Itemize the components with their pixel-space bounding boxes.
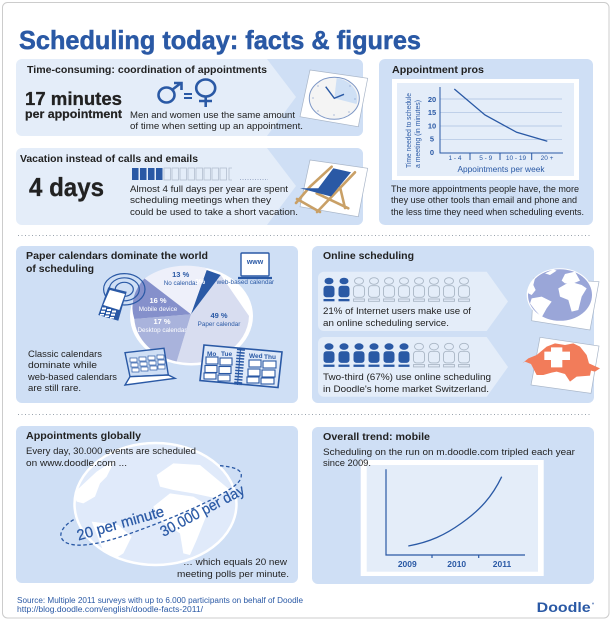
arrow panel: internet users <box>318 272 508 331</box>
stat: 4 days: 4 days <box>29 172 104 202</box>
pie chart: 49 % <box>210 311 228 320</box>
text: classic calendars <box>27 349 117 394</box>
pie chart: Mobile device <box>139 306 178 313</box>
source note: http://blog.doodle.com/english/doodle-facts-2011/ <box>17 605 204 614</box>
panel: paper calendars <box>16 246 298 403</box>
text: which equals <box>177 557 289 580</box>
description line 2: of time when setting up an appointment. <box>130 121 303 132</box>
line chart: 5 <box>430 134 434 144</box>
pie chart: Desktop calendar <box>137 327 187 334</box>
line chart: 0 <box>430 148 434 157</box>
text: every day: on www.doodle.com ... <box>26 458 127 469</box>
line chart: 20 <box>428 95 436 104</box>
pie chart: 13 % <box>172 270 190 279</box>
description: appointment pros <box>391 184 584 218</box>
line chart: Time needed to schedule <box>406 93 413 168</box>
people row 67% <box>324 343 470 367</box>
text: 67% <box>323 372 491 395</box>
heading: paper calendars <box>26 251 208 275</box>
pie chart: 17 % <box>153 317 171 326</box>
text: classic calendars: are still rare. <box>28 383 81 394</box>
description: appointment pros: the less time they need when scheduling events. <box>391 207 584 218</box>
trend chart: 2011 <box>493 559 511 569</box>
heading: vacation: Vacation instead of calls and emails <box>20 154 198 165</box>
text: which equals: … which equals 20 new <box>183 557 287 568</box>
line chart: 10 - 19 <box>506 155 526 162</box>
description: men and women: Men and women use the same amount <box>130 110 295 121</box>
text: which equals: meeting polls per minute. <box>177 569 289 580</box>
icon: male equals female <box>158 80 215 107</box>
line chart <box>392 79 579 180</box>
trend chart: 2010 <box>447 559 466 569</box>
icon: paper calendar: Mo <box>207 351 216 358</box>
heading: overall trend: Overall trend: mobile <box>323 432 430 443</box>
text: 21%: an online scheduling service. <box>323 318 449 329</box>
description: vacation: Almost 4 full days per year are spent <box>130 184 289 194</box>
source note: Source: Multiple 2011 surveys with up to 6.000 participants on behalf of Doodle <box>17 596 304 605</box>
text: 67%: in Doodle's home market Switzerland. <box>323 384 489 395</box>
icon: paper calendar: Tue <box>221 351 232 358</box>
description: vacation: could be used to take a short vacation. <box>130 207 298 217</box>
text: every day <box>26 446 196 469</box>
line chart: 10 <box>428 122 436 130</box>
text: classic calendars: dominate while <box>28 360 97 371</box>
pie chart: 3% <box>195 279 206 286</box>
title: Scheduling today: facts & figures <box>19 25 421 55</box>
heading: paper calendars: Paper calendars dominate the world <box>26 251 208 262</box>
pie chart: web-based calendar <box>216 279 274 286</box>
line chart: 20 + <box>541 155 554 162</box>
icon: world globe <box>73 443 236 565</box>
description: appointment pros: The more appointments people have, the more <box>391 184 579 195</box>
line chart: Appointments per week <box>458 165 546 174</box>
heading: online scheduling: Online scheduling <box>323 251 414 262</box>
heading: paper calendars: of scheduling <box>26 264 94 275</box>
text: every day: Every day, 30.000 events are scheduled <box>26 446 196 457</box>
icon: calendar laptop <box>125 348 175 385</box>
text: 21%: 21% of Internet users make use of <box>323 306 471 317</box>
description: vacation <box>130 184 298 217</box>
pie chart <box>130 266 274 366</box>
line chart: 15 <box>428 108 436 117</box>
heading: appointments globally: Appointments globally <box>26 431 141 442</box>
panel: appointments globally <box>16 426 298 583</box>
text: scheduling on the run <box>323 447 575 469</box>
description: vacation: scheduling meetings when they <box>130 195 272 205</box>
icon: paper calendar: Wed <box>249 353 263 360</box>
icon: www laptop <box>238 253 272 278</box>
stat caption: per appointment <box>25 107 122 121</box>
line chart: a meeting (in minutes) <box>415 100 422 168</box>
pie chart: 16 % <box>149 296 167 305</box>
icon: www laptop: www <box>246 259 264 266</box>
text: 21% <box>323 306 471 329</box>
pie chart: No calendar <box>164 280 198 287</box>
label: 20 per minute: 20 per minute <box>75 503 166 544</box>
line chart: 1 - 4 <box>448 155 462 162</box>
panel: vacation <box>16 148 368 225</box>
pie chart: Paper calendar <box>198 321 240 328</box>
text: classic calendars: Classic calendars <box>28 349 102 360</box>
heading: appointment pros: Appointment pros <box>392 65 484 76</box>
trend chart <box>361 460 544 576</box>
icon: paper calendar: Thu <box>264 354 276 361</box>
text: scheduling on the run: since 2009. <box>323 458 371 469</box>
dashed orbit <box>61 466 241 545</box>
icon: switzerland card <box>522 337 600 393</box>
text: scheduling on the run: Scheduling on the run on m.doodle.com tripled each year <box>323 447 575 458</box>
trend chart: 2009 <box>398 559 417 569</box>
icon: deck chair <box>296 160 368 217</box>
panel: appointment pros <box>379 59 593 225</box>
arrow panel: switzerland <box>318 337 508 397</box>
source note <box>17 596 304 614</box>
line chart: 5 - 9 <box>479 155 493 162</box>
panel: time-consuming <box>16 59 368 136</box>
panel: online scheduling <box>312 246 600 403</box>
icon: mobile phone <box>98 274 145 321</box>
heading: time-consuming: Time-consuming: coordination of appointments <box>27 65 267 76</box>
icon: globe card <box>527 268 599 330</box>
stat: 17 minutes: 17 minutes <box>25 88 122 109</box>
icon: clock <box>300 70 368 127</box>
text: classic calendars: web-based calendars <box>27 372 117 383</box>
people row 21% <box>324 278 470 301</box>
text: 67%: Two-third (67%) use online scheduling <box>323 372 491 383</box>
label: 30.000 per day: 30.000 per day <box>157 482 248 541</box>
logo: Doodle: Doodle <box>537 599 591 615</box>
icon: paper calendar <box>200 345 282 388</box>
description: appointment pros: they use other tools than email and phone and <box>391 195 577 206</box>
panel: overall trend <box>312 427 594 584</box>
day bars <box>132 168 268 180</box>
